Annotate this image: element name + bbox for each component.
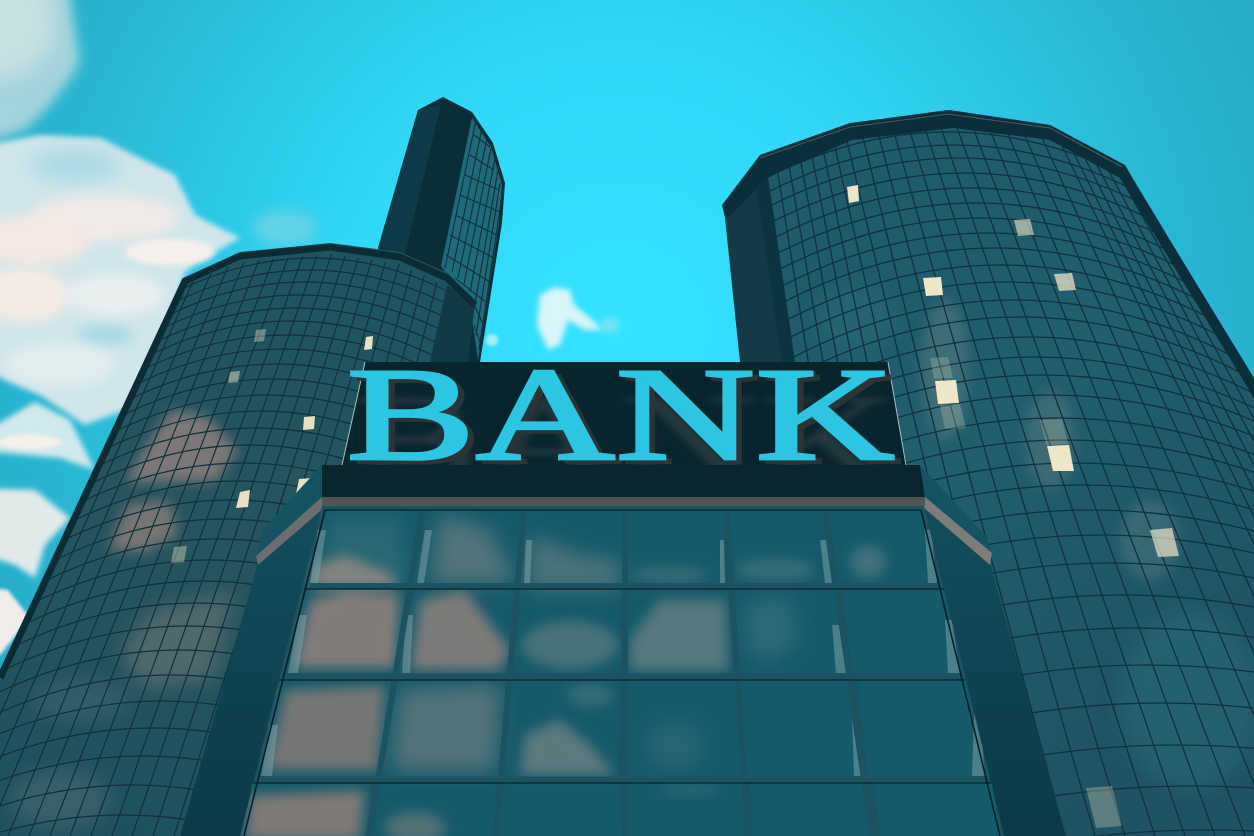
sign board xyxy=(342,362,906,465)
entrance building xyxy=(180,465,1066,836)
glass edge highlights xyxy=(261,530,985,776)
glass panes xyxy=(244,510,1000,836)
BANK sign xyxy=(342,362,906,466)
left tower xyxy=(0,243,475,836)
entrance fascia xyxy=(322,465,925,498)
right tower lit windows xyxy=(847,185,1179,828)
right tower reflections and window grid xyxy=(766,125,1254,836)
entrance sloped roof sides xyxy=(256,465,326,558)
clouds on the left xyxy=(0,0,317,660)
glass frame backing xyxy=(240,506,1004,836)
cloud reflections in glass xyxy=(244,507,1000,836)
right tower xyxy=(722,110,1254,836)
sign letter extrusion: BANK xyxy=(353,344,901,492)
entrance side walls xyxy=(180,505,325,836)
entrance roof trim xyxy=(256,497,325,565)
back tower lit face xyxy=(378,105,441,254)
glass mullions xyxy=(274,512,870,836)
back tower xyxy=(378,97,505,362)
left tower dark column xyxy=(430,285,475,362)
sign letter reflection: BANK xyxy=(351,366,899,514)
left tower cornice and edge xyxy=(0,247,475,678)
back tower glass face xyxy=(441,118,502,360)
sign letters: BANK xyxy=(347,340,895,488)
right tower cornice xyxy=(722,110,1254,398)
left tower reflections and window grid xyxy=(0,250,445,836)
left tower lit windows xyxy=(171,329,373,563)
right tower dark column xyxy=(722,168,795,362)
small cloud in centre xyxy=(486,287,620,350)
